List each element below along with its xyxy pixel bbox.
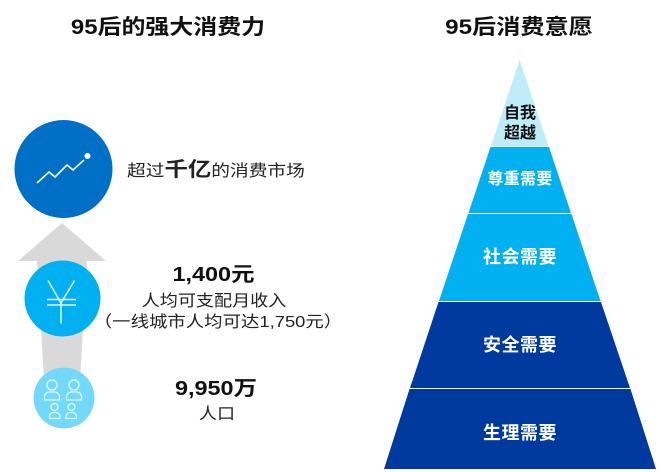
text: market: 超过千亿的消费市场 — [127, 159, 305, 181]
text: population — [175, 378, 257, 423]
tier: esteem — [468, 147, 571, 213]
text: population: 9,950万 — [175, 378, 257, 400]
tier: self-transcendence — [491, 60, 548, 146]
text: income: 人均可支配月收入 — [142, 293, 286, 310]
label: physiological: 生理需要 — [483, 423, 557, 443]
title: right: 95后消费意愿 — [445, 16, 593, 39]
pyramid — [384, 60, 656, 469]
text: income: （一线城市人均可达1,750元） — [94, 314, 342, 331]
text: income — [94, 264, 342, 331]
tier: social — [439, 214, 600, 301]
icon: people circle — [34, 368, 94, 428]
tier: safety — [410, 302, 630, 388]
label: self-transcendence: 超越 — [504, 125, 536, 142]
tier: physiological — [384, 389, 656, 469]
arrow: upward growth — [18, 223, 106, 380]
label: self-transcendence — [504, 104, 536, 142]
label: esteem: 尊重需要 — [487, 171, 553, 188]
title: left: 95后的强大消费力 — [71, 16, 265, 39]
text: income: 1,400元 — [173, 264, 254, 286]
text: population: 人口 — [199, 406, 235, 423]
label: social: 社会需要 — [483, 247, 557, 267]
label: safety: 安全需要 — [483, 335, 557, 355]
icon: trend chart circle — [14, 120, 112, 218]
label: self-transcendence: 自我 — [504, 105, 536, 122]
icon: yuan circle — [24, 260, 100, 336]
